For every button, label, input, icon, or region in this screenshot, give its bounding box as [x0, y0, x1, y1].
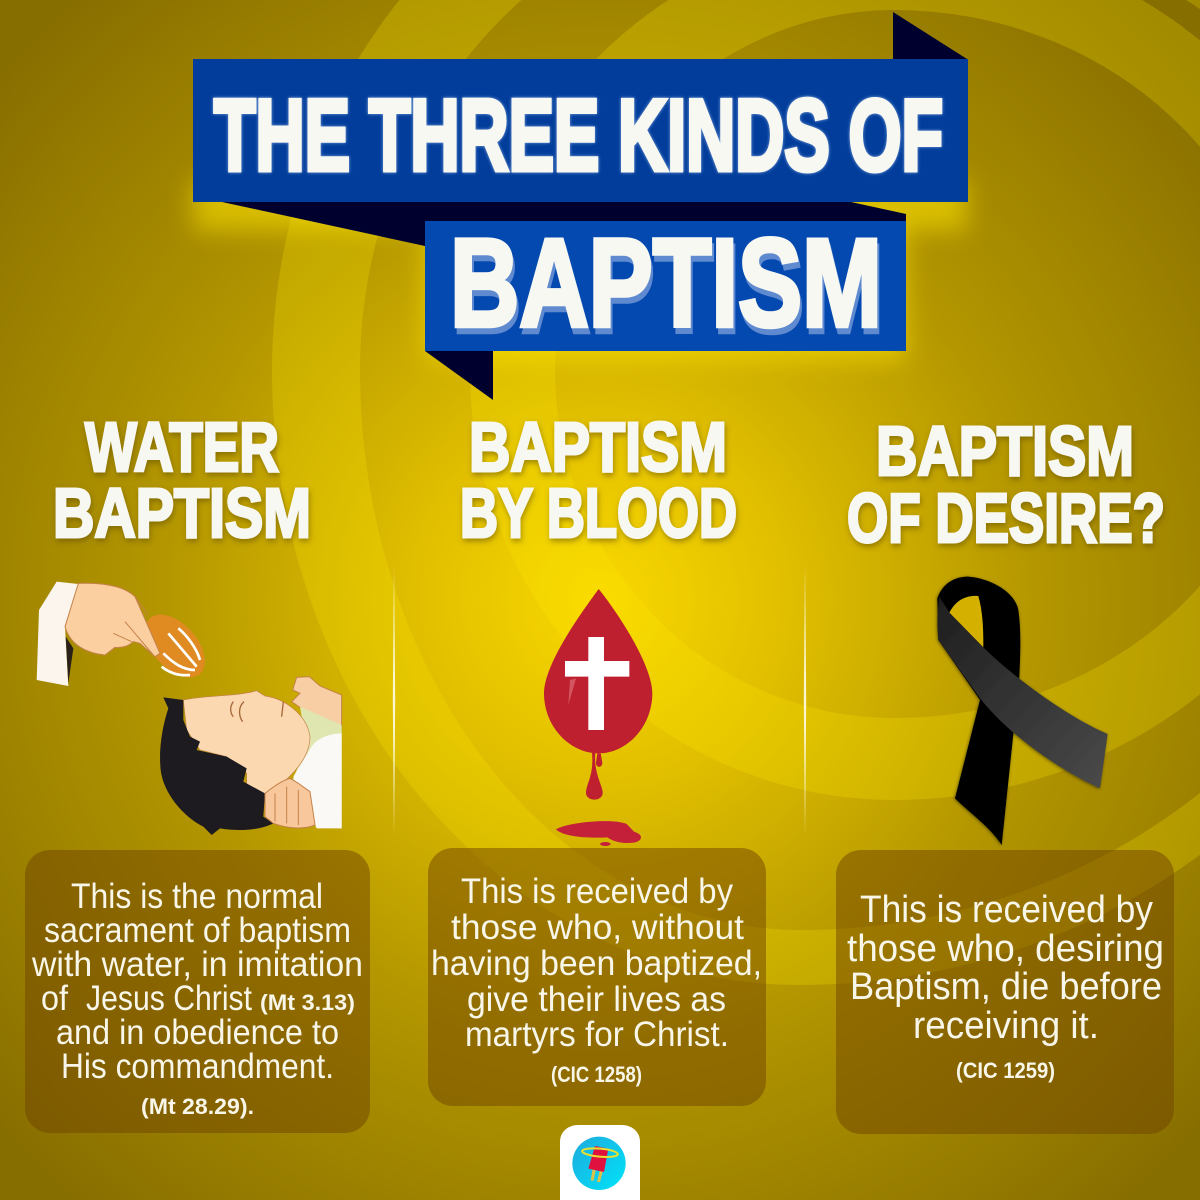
column heading: baptism by blood	[460, 408, 737, 552]
panel: baptism of desire description: Baptism, die before	[850, 966, 1162, 1008]
banner glow	[193, 180, 967, 360]
panel: water baptism description: sacrament of baptism	[44, 911, 351, 950]
baby fist	[292, 677, 342, 727]
panel: baptism by blood description: those who, without	[451, 908, 744, 947]
column heading: water baptism: BAPTISM	[53, 474, 311, 552]
baby hair	[160, 697, 273, 835]
drop highlight	[568, 678, 576, 705]
column heading: baptism by blood: BAPTISM	[469, 408, 727, 486]
sleeve	[37, 582, 78, 686]
blood pool	[556, 821, 641, 843]
panel: baptism of desire description: (CIC 1259)	[956, 1058, 1055, 1083]
banner lower strip	[425, 221, 906, 351]
panel: baptism by blood description	[428, 848, 766, 1106]
icon: priest hand pouring water on baby	[37, 582, 342, 835]
column heading: water baptism	[53, 408, 311, 552]
hand	[65, 583, 160, 657]
shell of water	[134, 604, 216, 688]
panel: baptism by blood description: (CIC 1258)	[551, 1062, 642, 1087]
panel: baptism of desire description: This is received by	[860, 889, 1153, 931]
panel: water baptism description: (Mt 28.29).	[141, 1094, 254, 1119]
title banner	[193, 12, 968, 400]
panel: baptism by blood description: This is received by	[461, 872, 733, 911]
panel: water baptism description: His commandment.	[61, 1047, 334, 1086]
baby hand	[265, 778, 315, 828]
panel: baptism by blood description: having been baptized,	[431, 944, 762, 983]
drips	[586, 753, 603, 800]
popsicle sticks	[591, 1168, 603, 1182]
icon: popsicle logo badge	[560, 1125, 640, 1200]
badge circle	[572, 1137, 626, 1190]
panel: baptism by blood description: martyrs for Christ.	[465, 1015, 729, 1054]
panel: water baptism description: (Mt 3.13)	[260, 990, 355, 1015]
panel: baptism by blood description: give their lives as	[467, 980, 726, 1019]
panel: baptism of desire description	[836, 850, 1174, 1134]
column divider left	[393, 565, 395, 835]
halo	[582, 1147, 618, 1158]
column heading: baptism of desire	[847, 412, 1165, 557]
icon: blood drop with cross	[544, 589, 652, 846]
icon: black ribbon	[937, 577, 1108, 845]
panel: water baptism description: of	[41, 979, 68, 1018]
ribbon front	[937, 597, 1108, 788]
panel: baptism of desire description: receiving it.	[913, 1005, 1099, 1047]
column heading: baptism of desire: BAPTISM	[876, 412, 1134, 490]
column heading: baptism by blood: BY BLOOD	[460, 474, 737, 552]
ribbon back	[937, 577, 1020, 845]
panel: water baptism description	[25, 850, 370, 1133]
column heading: water baptism: WATER	[85, 408, 279, 486]
panel: water baptism description: with water, in imitation	[31, 945, 363, 984]
banner top strip	[193, 59, 968, 202]
banner folds	[222, 12, 967, 400]
panel: baptism of desire description: those who, desiring	[847, 928, 1164, 970]
title line two shadow and text: BAPTISM	[452, 220, 884, 359]
title line two shadow and text: BAPTISM	[450, 214, 882, 353]
panel: water baptism description: Jesus Christ	[86, 979, 252, 1018]
column divider right	[804, 565, 806, 835]
baby face	[183, 691, 310, 795]
badge tile	[560, 1125, 640, 1200]
white cross	[565, 637, 629, 730]
baby collar and body	[287, 707, 342, 828]
popsicle	[588, 1146, 608, 1172]
panel: water baptism description: and in obedience to	[56, 1013, 339, 1052]
panel: water baptism description: This is the normal	[71, 877, 323, 916]
drop	[544, 589, 652, 753]
loop opening	[949, 596, 983, 647]
